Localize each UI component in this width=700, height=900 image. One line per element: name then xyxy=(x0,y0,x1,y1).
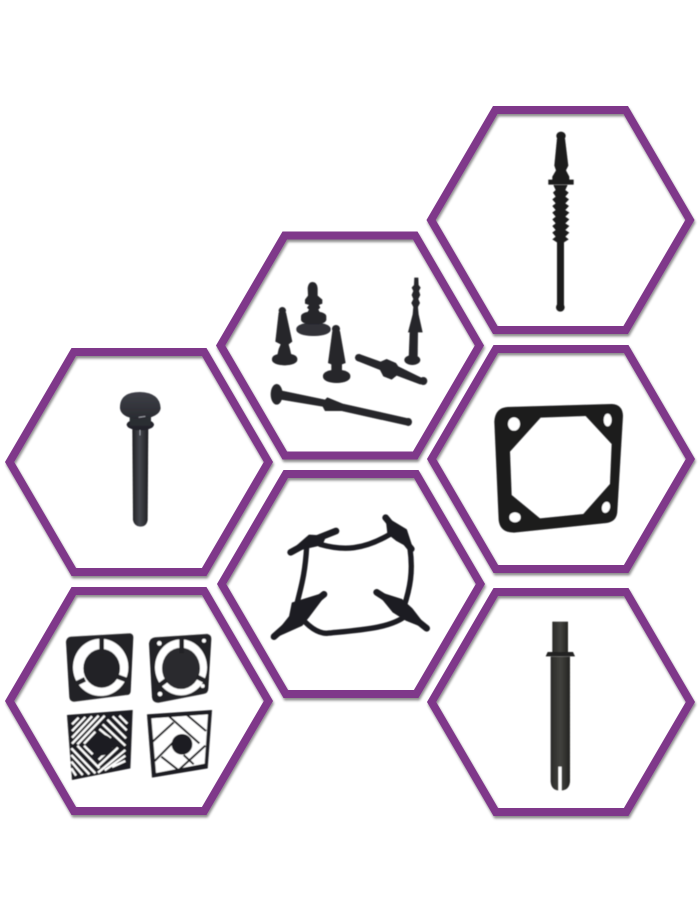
panel: domed pin, left xyxy=(10,352,268,572)
centre cone mount xyxy=(323,325,350,383)
part: assorted grommet mounts xyxy=(271,278,427,426)
part: four-arm strap retainer xyxy=(273,518,427,638)
mounting holes xyxy=(508,414,612,522)
slot xyxy=(558,767,562,791)
strap loop xyxy=(296,534,411,633)
fan guard: three-spoke with holes xyxy=(149,634,211,703)
hexagon frame xyxy=(432,349,690,569)
fan guard: wide pinwheel grille xyxy=(147,710,212,778)
thin ribbed mount xyxy=(404,278,423,365)
highlights xyxy=(139,416,145,435)
hexagon frame xyxy=(221,236,479,456)
hexagon frame xyxy=(10,352,268,572)
part: square gasket xyxy=(494,404,623,533)
part: domed pin xyxy=(120,392,161,527)
arms xyxy=(274,518,427,637)
panel: square gasket, right xyxy=(432,349,690,569)
panel: slotted pin, bottom right xyxy=(432,592,690,812)
panel: fan guards, bottom left xyxy=(10,591,268,811)
panel: strap retainer, centre xyxy=(222,474,480,694)
hexagon frame xyxy=(222,474,480,694)
long flanged pin xyxy=(271,384,412,426)
hexagon frame xyxy=(10,591,268,811)
fan guard: solid three-spoke xyxy=(66,633,133,702)
panel: assorted mounts, centre top xyxy=(221,236,479,456)
stud with two-step base xyxy=(296,282,331,336)
fan guard: fine diagonal grille xyxy=(67,710,133,780)
tapered hubs xyxy=(273,518,426,638)
panel: bellows pin, top right xyxy=(431,110,690,330)
part: four fan guards xyxy=(66,633,212,780)
double cone pin xyxy=(355,354,427,385)
part: slotted pin xyxy=(546,622,575,791)
left cone mount xyxy=(272,307,297,365)
hexagon frame xyxy=(431,110,690,330)
part: bellows pin xyxy=(548,132,574,312)
hexagon frame xyxy=(432,592,690,812)
